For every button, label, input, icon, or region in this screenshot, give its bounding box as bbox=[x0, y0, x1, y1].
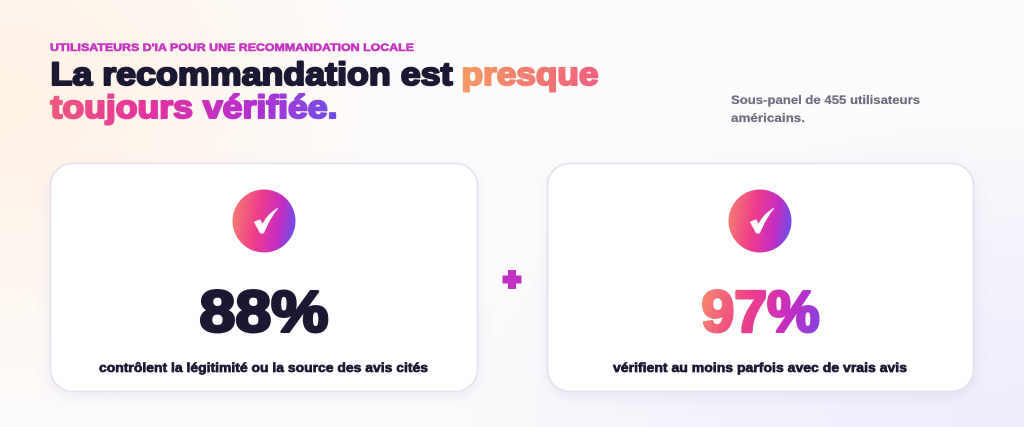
caption: contrôlent la légitimité ou la source des avis cités bbox=[99, 360, 428, 375]
icon: plus bbox=[503, 270, 521, 288]
icon: check badge bbox=[728, 190, 792, 252]
panel: 88% bbox=[50, 164, 478, 392]
heading bbox=[50, 56, 598, 125]
stat: 88%: 88% bbox=[200, 280, 328, 344]
sub-panel note: Sous-panel de 455 utilisateurs bbox=[731, 95, 920, 107]
eyebrow label: UTILISATEURS D'IA POUR UNE RECOMMANDATION LOCALE bbox=[50, 42, 414, 54]
sub-panel note: américains. bbox=[731, 113, 805, 125]
heading: presque bbox=[462, 56, 598, 92]
heading: toujours vérifiée. bbox=[50, 89, 338, 125]
heading: La recommandation est bbox=[50, 56, 453, 92]
panel: 97% bbox=[548, 164, 974, 392]
caption: vérifient au moins parfois avec de vrais avis bbox=[613, 360, 907, 375]
stat: 97%: 97% bbox=[702, 280, 820, 344]
sub-panel note bbox=[731, 95, 920, 125]
icon: check badge bbox=[232, 190, 296, 252]
